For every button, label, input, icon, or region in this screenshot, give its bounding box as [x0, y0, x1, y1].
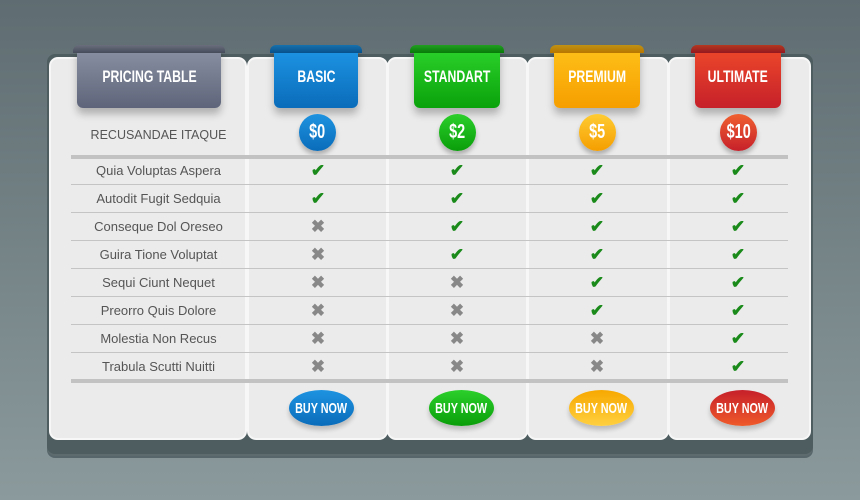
button: premium: BUY NOW [576, 400, 628, 416]
price: $5 [579, 114, 616, 151]
marks: premium: ✔ [590, 273, 604, 292]
feature labels: Conseque Dol Oreseo [94, 219, 223, 234]
marks: basic: ✖ [311, 301, 325, 320]
feature labels [94, 163, 223, 374]
marks: premium: ✔ [590, 301, 604, 320]
button: standart [429, 390, 494, 426]
marks: premium: ✖ [590, 329, 604, 348]
marks: basic: ✔ [311, 189, 325, 208]
marks: standart: ✔ [450, 189, 464, 208]
feature labels: Trabula Scutti Nuitti [102, 359, 215, 374]
marks: standart: ✔ [450, 245, 464, 264]
panel: standart column [387, 57, 528, 440]
button: ultimate [710, 390, 775, 426]
ribbon: basic: BASIC [297, 66, 335, 86]
ribbon: ultimate: ULTIMATE [708, 66, 768, 86]
marks: premium: ✔ [590, 189, 604, 208]
price: $5: $5 [589, 121, 606, 143]
marks: standart: ✖ [450, 273, 464, 292]
marks: premium: ✔ [590, 161, 604, 180]
marks: ultimate: ✔ [731, 329, 745, 348]
feature labels: Quia Voluptas Aspera [96, 163, 221, 178]
marks: standart: ✔ [450, 161, 464, 180]
ribbon: standart: STANDART [424, 66, 490, 86]
price: $10 [720, 114, 757, 151]
marks: ultimate: ✔ [731, 357, 745, 376]
marks: ultimate: ✔ [731, 161, 745, 180]
marks: basic: ✖ [311, 217, 325, 236]
price: $0 [299, 114, 336, 151]
marks: ultimate: ✔ [731, 189, 745, 208]
marks: basic [311, 161, 325, 376]
ribbon: premium [554, 45, 640, 108]
ribbon: standart [414, 45, 500, 108]
price: $2: $2 [449, 121, 466, 143]
marks: standart: ✔ [450, 217, 464, 236]
marks: premium: ✔ [590, 217, 604, 236]
header label: RECUSANDAE ITAQUE [91, 128, 226, 142]
button: ultimate: BUY NOW [717, 400, 769, 416]
ribbon: pricing table [77, 45, 221, 108]
panel: premium column [527, 57, 669, 440]
ribbon: basic [274, 45, 358, 108]
marks: standart: ✖ [450, 301, 464, 320]
button: premium [569, 390, 634, 426]
ribbon: ultimate [695, 45, 781, 108]
feature labels: Molestia Non Recus [100, 331, 217, 346]
table base shadow [47, 54, 813, 454]
marks: ultimate [731, 161, 745, 376]
marks: standart: ✖ [450, 329, 464, 348]
ribbon: premium: PREMIUM [568, 66, 626, 86]
ribbon: pricing table: PRICING TABLE [102, 66, 196, 86]
price: $10: $10 [726, 121, 751, 143]
button: basic: BUY NOW [296, 400, 348, 416]
marks: basic: ✖ [311, 273, 325, 292]
marks: basic: ✖ [311, 357, 325, 376]
panel: basic column [247, 57, 388, 440]
button: standart: BUY NOW [436, 400, 488, 416]
marks: basic: ✔ [311, 161, 325, 180]
button: basic [289, 390, 354, 426]
feature labels: Autodit Fugit Sedquia [96, 191, 221, 206]
panel: labels column [49, 57, 247, 440]
marks: premium: ✔ [590, 245, 604, 264]
marks: basic: ✖ [311, 329, 325, 348]
marks: ultimate: ✔ [731, 301, 745, 320]
marks: ultimate: ✔ [731, 217, 745, 236]
marks: basic: ✖ [311, 245, 325, 264]
feature labels: Guira Tione Voluptat [100, 247, 217, 262]
price: $2 [439, 114, 476, 151]
marks: standart [450, 161, 464, 376]
marks: premium: ✖ [590, 357, 604, 376]
marks: premium [590, 161, 604, 376]
marks: ultimate: ✔ [731, 245, 745, 264]
price: $0: $0 [309, 121, 326, 143]
marks: standart: ✖ [450, 357, 464, 376]
feature labels: Preorro Quis Dolore [101, 303, 216, 318]
panel: ultimate column [668, 57, 811, 440]
marks: ultimate: ✔ [731, 273, 745, 292]
feature labels: Sequi Ciunt Nequet [102, 275, 215, 290]
